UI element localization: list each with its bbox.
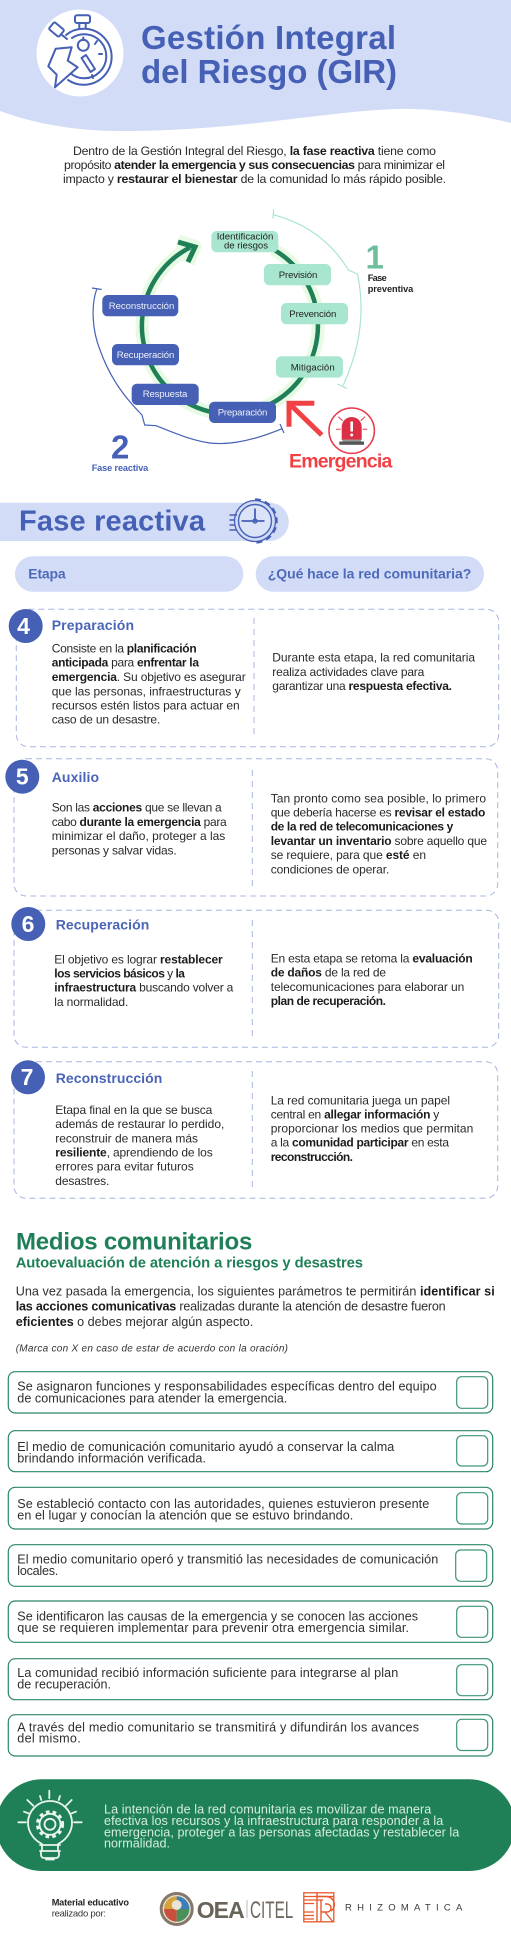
label: fase reactiva: Fase reactiva [92,463,149,473]
title: Gestión Integral [141,19,396,56]
text: Preparación stage: Consiste en la planificación [52,642,197,656]
label: fase preventiva: 1 [366,238,384,276]
section heading: Fase reactiva: Fase reactiva [19,506,206,538]
stage: Preparación: Preparación [218,408,267,418]
credits label: Material educativo [52,1898,129,1908]
column header: ¿Qué hace la red comunitaria?: ¿Qué hace la red comunitaria? [268,566,471,582]
credits label: realizado por: [52,1909,106,1920]
logo: OEA seal [161,1894,192,1924]
heading: Medios comunitarios [16,1228,363,1271]
text: Preparación stage: caso de un desastre. [52,713,160,727]
number badge 6: 6 [22,911,34,937]
text: Preparación community network: garantizar una respuesta efectiva. [272,679,452,693]
instruction note: (Marca con X en caso de estar de acuerdo con la oración) [16,1344,288,1355]
heading: Medios comunitarios: Medios comunitarios [16,1228,252,1255]
text: Auxilio stage [52,801,227,857]
stage: Identificación de riesgos [211,231,278,252]
text: closing message: efectiva los recursos y la infraestructura para responder a la [104,1814,443,1828]
stage: Preparación [209,402,276,423]
text: Auxilio stage: minimizar el daño, proteger a las [52,829,225,843]
number badge 7 [11,1060,45,1094]
checklist row 5 [8,1601,493,1642]
text: Recuperación community network: En esta etapa se retoma la evaluación [271,952,473,966]
text: Recuperación stage [54,952,234,1009]
text: Auxilio community network [271,791,487,876]
checklist row 4 [8,1545,493,1586]
label: fase preventiva: preventiva [368,284,414,294]
text: Reconstrucción stage: Etapa final en la que se busca [55,1103,213,1117]
panel: Reconstrucción [11,1060,498,1198]
panel: Preparación [9,609,499,747]
stage: Prevención [281,303,348,324]
text: Auxilio community network: levantar un inventario sobre aquello que [271,834,487,848]
panel: Recuperación [11,907,499,1047]
stage: Respuesta: Respuesta [143,389,188,400]
icon: light bulb with gear [18,1791,82,1860]
logo: Rhizomatica mark [304,1893,334,1922]
checklist row 6: La comunidad recibió información suficiente para integrarse al plan [17,1666,398,1680]
text: Preparación stage: emergencia. Su objetivo es asegurar [52,670,246,684]
label: Emergencia: Emergencia [289,451,392,473]
checklist row 7: A través del medio comunitario se transmitirá y difundirán los avances [17,1720,419,1734]
intro text: Dentro de la Gestión Integral del Riesgo, la fase reactiva tiene como [73,144,436,158]
checklist row 6: de recuperación. [17,1678,111,1692]
number badge 4 [9,609,43,643]
preventive phase bracket [273,210,361,388]
section heading: Fase reactiva [0,500,289,542]
text: Auxilio community network: Tan pronto como sea posible, lo primero [271,791,486,805]
label: fase preventiva: Fase [368,273,387,283]
icon: stopwatch with lightning bolt [36,10,124,96]
icon: alarm beacon [329,408,374,453]
panel: Auxilio [5,759,498,896]
text: Auxilio stage: personas y salvar vidas. [52,843,177,857]
label: fase reactiva [92,428,149,473]
text: Reconstrucción stage [55,1103,224,1188]
text: Auxilio community network: que debería hacerse es revisar el estado [271,806,485,820]
heading: Preparación: Preparación [52,617,134,633]
checklist row 2: brindando información verificada. [17,1452,206,1466]
column header: Etapa: Etapa [28,566,66,582]
text: closing message: La intención de la red comunitaria es movilizar de manera [104,1802,431,1816]
checklist row 4: locales. [17,1564,58,1578]
icon: clock gear [230,500,276,542]
text: Reconstrucción community network: proporcionar los medios que permitan [271,1122,473,1136]
stage: Previsión: Previsión [279,270,317,281]
text: Recuperación community network: de daños de la red de [271,966,386,980]
heading: Recuperación: Recuperación [56,916,149,932]
stage: Previsión [264,264,331,285]
text: Auxilio community network: de la red de telecomunicaciones y [271,820,454,834]
stage: Recuperación [112,344,179,365]
stage: Prevención: Prevención [289,309,336,320]
heading: Reconstrucción: Reconstrucción [56,1070,162,1086]
text: Reconstrucción stage: reconstruir de manera más [55,1131,198,1145]
header banner [0,0,511,131]
stage: Identificación de riesgos: Identificación [217,232,273,242]
intro text: propósito atender la emergencia y sus consecuencias para minimizar el [64,158,445,172]
text: Recuperación stage: El objetivo es lograr restablecer [54,952,223,966]
text: Auxilio community network: condiciones de operar. [271,862,389,876]
checklist row 2 [8,1431,493,1472]
text: Preparación stage: que las personas, infraestructuras y [52,684,241,698]
checklist row 2: El medio de comunicación comunitario ayudó a conservar la calma [17,1440,394,1454]
text: Recuperación community network [271,952,473,1008]
stage: Identificación de riesgos: de riesgos [224,241,268,252]
text: closing message: emergencia, proteger a las personas afectadas y restablecer la [104,1825,459,1839]
number badge 5 [5,760,39,794]
checklist row 1: Se asignaron funciones y responsabilidades específicas dentro del equipo [17,1380,437,1394]
checklist row 5: que se requieren implementar para prevenir otra emergencia similar. [17,1621,409,1635]
checklist row 5: Se identificaron las causas de la emergencia y se conocen las acciones [17,1609,418,1623]
stage: Mitigación: Mitigación [291,362,335,373]
label: fase preventiva [366,238,414,294]
checklist row 3: en el lugar y conocían la atención que se estuvo brindando. [17,1509,353,1523]
number badge 6 [11,907,45,941]
stage: Respuesta [132,384,199,405]
text: Recuperación stage: infraestructura buscando volver a [54,981,234,995]
checklist row 1 [8,1372,493,1413]
text: Auxilio stage: Son las acciones que se llevan a [52,801,222,815]
arrow: emergency [289,403,322,435]
text: Auxilio community network: se requiere, para que esté en [271,848,426,862]
column header: ¿Qué hace la red comunitaria? [256,556,484,592]
intro text: impacto y restaurar el bienestar de la comunidad lo más rápido posible. [63,172,446,186]
heading: Medios comunitarios: Autoevaluación de atención a riesgos y desastres [16,1255,363,1271]
logo: Rhizomatica wordmark: RHIZOMATICA [345,1903,463,1914]
checklist row 7 [8,1715,493,1756]
checklist row 4: El medio comunitario operó y transmitió las necesidades de comunicación [17,1553,438,1567]
text: Reconstrucción community network: La red comunitaria juega un papel [271,1093,450,1107]
text: Preparación stage [52,642,246,727]
text: Reconstrucción community network: central en allegar información y [271,1107,439,1121]
stage: Recuperación: Recuperación [117,350,174,361]
text: Reconstrucción stage: errores para evitar futuros [55,1160,194,1174]
credits label [52,1898,129,1920]
title: del Riesgo (GIR) [141,53,397,90]
title [141,19,397,90]
text: Recuperación stage: la normalidad. [54,995,128,1009]
intro paragraph [16,1285,495,1329]
checklist row 6 [8,1659,493,1700]
logo: OEA CITEL wordmark: CITEL [250,1897,293,1924]
text: Recuperación community network: telecomunicaciones para elaborar un [271,980,464,994]
text: Recuperación stage: los servicios básicos y la [54,967,185,981]
text: Preparación community network [272,651,475,693]
number badge 5: 5 [16,764,29,790]
text: Reconstrucción stage: resiliente, aprendiendo de los [55,1146,213,1160]
text: Auxilio stage: cabo durante la emergencia para [52,815,227,829]
number badge 4: 4 [17,613,30,639]
logo: OEA CITEL wordmark: OEA [197,1897,245,1923]
text: Recuperación community network: plan de recuperación. [271,994,386,1008]
panel: closing message [0,1779,511,1871]
label: fase reactiva: 2 [111,428,129,465]
stage: Mitigación [276,356,343,378]
text: Reconstrucción community network [271,1093,473,1164]
checklist row 7: del mismo. [17,1732,81,1746]
text: Reconstrucción stage: además de restaurar lo perdido, [55,1117,224,1131]
intro paragraph: Una vez pasada la emergencia, los siguientes parámetros te permitirán identificar si [16,1285,495,1299]
text: Preparación stage: anticipada para enfrentar la [52,656,199,670]
text: closing message: normalidad. [104,1837,170,1851]
text: Preparación community network: Durante esta etapa, la red comunitaria [272,651,475,665]
column header: Etapa [15,556,243,592]
intro paragraph: eficientes o debes mejorar algún aspecto. [16,1315,253,1329]
intro paragraph: las acciones comunicativas realizadas durante la atención de desastre fueron [16,1300,446,1314]
checklist row 3: Se estableció contacto con las autoridades, quienes estuvieron presente [17,1497,429,1511]
cycle diagram [92,210,414,473]
checklist row 1: de comunicaciones para atender la emergencia. [17,1392,287,1406]
text: closing message [104,1802,459,1851]
stage: Reconstrucción: Reconstrucción [109,301,174,312]
text: Preparación community network: realiza actividades clave para [272,665,425,679]
logo: OEA CITEL wordmark [197,1897,293,1924]
stage: Reconstrucción [102,295,178,316]
text: Preparación stage: recursos estén listos para actuar en [52,699,240,713]
intro text [63,144,446,186]
checklist row 3 [8,1487,493,1529]
text: Reconstrucción stage: desastres. [55,1174,109,1188]
number badge 7: 7 [21,1064,33,1090]
text: Reconstrucción community network: reconstrucción. [271,1150,353,1164]
reactive phase bracket [92,288,284,444]
heading: Auxilio: Auxilio [52,769,99,785]
cycle ring and arrow [142,241,318,414]
text: Reconstrucción community network: a la comunidad participar en esta [271,1136,449,1150]
